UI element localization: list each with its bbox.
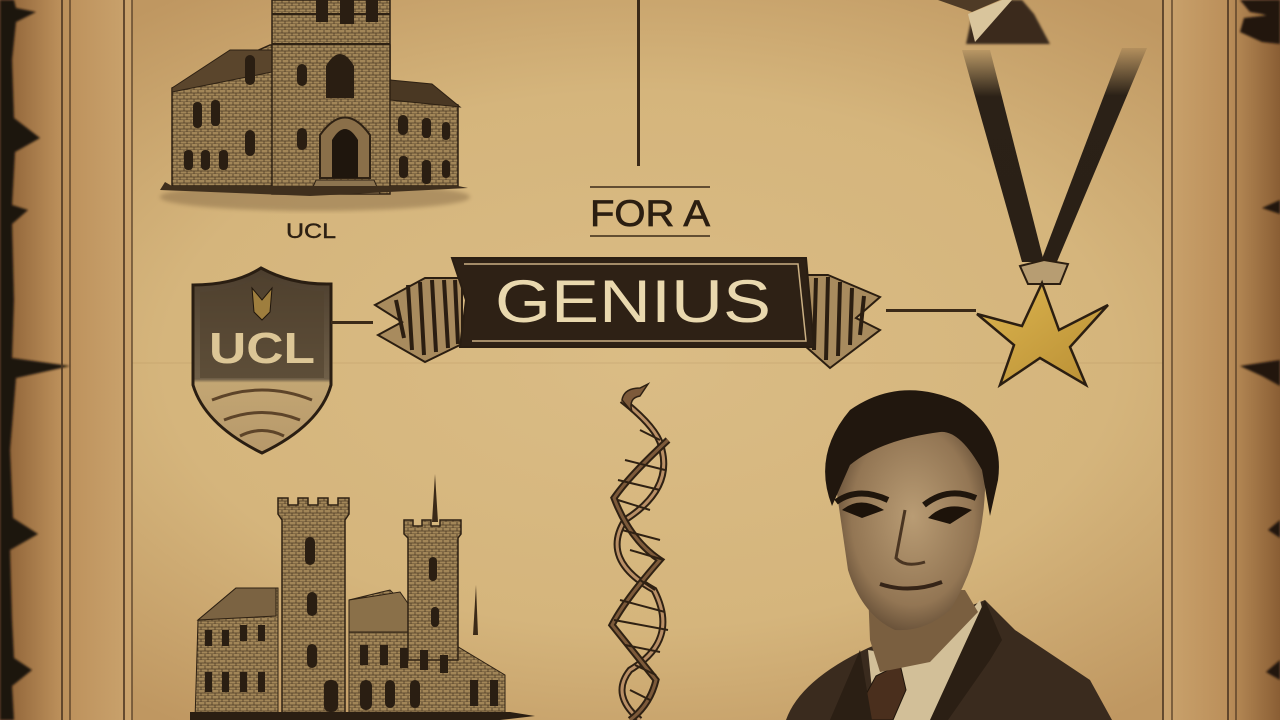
face [834,412,985,630]
hair [825,390,999,516]
shield: UCL crest [193,268,331,453]
medal ribbon [962,48,1147,264]
burnt right edge [1240,0,1280,680]
medal clasp [1020,260,1068,284]
burnt left edge [0,0,70,720]
shirt collar [868,600,985,720]
eyes [842,502,972,524]
brows [836,493,976,505]
banner: genius: GENIUS [495,268,771,335]
neck [868,590,978,672]
caption: UCL: UCL [286,220,336,243]
portrait: man in suit [786,390,1112,720]
illustration: castle building, bottom [190,474,535,720]
lapels [830,600,1002,720]
double frame lines right [1163,0,1236,720]
vertical rule [637,0,640,166]
figure collar at top right [938,0,1050,44]
connector: banner to star [886,309,976,312]
illustration: DNA helix [612,384,668,720]
connector: shield to banner [331,321,373,324]
shield: UCL crest: UCL [209,324,315,373]
nose [896,510,925,564]
banner: genius [375,258,880,368]
suit jacket [786,600,1112,720]
mouth [880,582,942,589]
double frame lines left [62,0,132,720]
heading: for a: FOR A [590,193,710,234]
gold star medal [977,283,1108,385]
necktie [852,664,906,720]
illustration: UCL building, top [160,0,470,211]
